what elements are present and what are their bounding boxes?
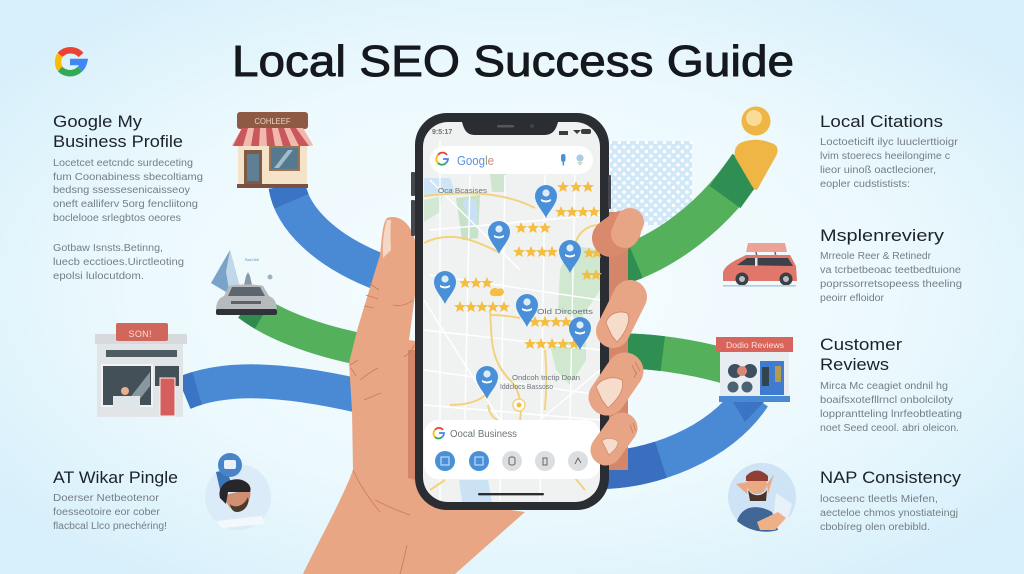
- text block: Google My Business Profile: Business Profile: [53, 132, 183, 151]
- search bar: [430, 146, 593, 174]
- icon: red car with roof rack: [723, 243, 797, 287]
- text block: Google My Business Profile: epolsi lulocutdom.: [53, 271, 144, 282]
- map rating stars: [454, 181, 603, 349]
- bottom business card: [424, 420, 600, 479]
- text block: Msplenreviery: va tcrbetbeoac teetbedtuione: [820, 265, 961, 276]
- status bar: 9:5:17: [432, 129, 452, 136]
- map labels: Old Dircoetts: [537, 309, 594, 316]
- text block: NAP Consistency: locseenc tleetls Miefen,: [820, 494, 938, 505]
- screen map: [423, 122, 600, 502]
- text block: Google My Business Profile: Gotbaw Isnsts.Betinng,: [53, 243, 163, 254]
- text block: Msplenreviery: Msplenreviery: [820, 226, 945, 245]
- text block: NAP Consistency: NAP Consistency: [820, 468, 962, 487]
- text block: Local Citations: lieor uinoß oactlecioner,: [820, 165, 936, 176]
- map labels: [438, 188, 594, 391]
- text block: Google My Business Profile: luecb ecctioes.Uirctleoting: [53, 257, 184, 268]
- icon: small Google G: [436, 153, 448, 165]
- text block: NAP Consistency: aecteloe chmos ynostiateingj: [820, 508, 958, 519]
- text block: Google My Business Profile: bedsng ssessesenicaisseoy: [53, 185, 190, 196]
- text block: Local Citations: lvim stoerecs heeilongime c: [820, 151, 950, 162]
- icon: red sign storefront: SON!: [128, 329, 152, 339]
- text block: Customer Reviews: [820, 335, 962, 434]
- hand: palm and arm: [303, 212, 628, 574]
- home indicator: [478, 493, 544, 495]
- ribbon: green left: [248, 305, 370, 351]
- icon: silver car with map: Raa Db6: [245, 258, 259, 262]
- text block: Customer Reviews: Reviews: [820, 355, 889, 374]
- text block: Google My Business Profile: boclelooe srlegbtos oeores: [53, 213, 181, 224]
- text block: Google My Business Profile: Google My: [53, 112, 143, 131]
- text block: Msplenreviery: poprssorretsopeess theeling: [820, 279, 962, 290]
- icon: silver car with map: [211, 250, 277, 315]
- map labels: Oca Bcasises: [438, 188, 488, 195]
- ribbon: blue bottom right: [600, 396, 764, 470]
- icon: Google logo: [58, 50, 84, 73]
- phone: [411, 113, 611, 510]
- dotted decoration square: [610, 141, 692, 225]
- text block: Customer Reviews: noet Seed ceool. abri oleicon.: [820, 423, 959, 434]
- text block: Google My Business Profile: oneft ealliferv 5org fencliitong: [53, 199, 198, 210]
- map pins: [434, 185, 591, 399]
- ribbon: blue top left: [287, 186, 385, 274]
- card action buttons: [435, 451, 588, 471]
- search wordmark: Google: [457, 153, 494, 168]
- text block: Local Citations: Local Citations: [820, 112, 943, 131]
- text block: Msplenreviery: peoirr efloidor: [820, 293, 885, 304]
- text block: Customer Reviews: lopprantteling lnrfeobtleating: [820, 409, 962, 420]
- ribbon: green top right: [605, 165, 748, 270]
- text block: NAP Consistency: cbobíreg olen orebibld.: [820, 522, 930, 533]
- icon: reviewer avatar with chat bubble: [205, 453, 271, 530]
- text block: AT Wikar Pingle: AT Wikar Pingle: [53, 468, 178, 487]
- phone body: [415, 113, 609, 510]
- text block: Customer Reviews: boaifsxotefllrncl onbolciloty: [820, 395, 953, 406]
- text block: Customer Reviews: Mirca Mc ceagiet ondnil hg: [820, 381, 948, 392]
- text block: Msplenreviery: Mrreole Reer & Retinedr: [820, 251, 932, 262]
- text block: AT Wikar Pingle: [53, 468, 178, 532]
- icon: red sign storefront: [95, 323, 187, 417]
- status bar: [432, 129, 591, 136]
- phone notch: [462, 122, 558, 135]
- text block: Google My Business Profile: fum Coonabiness sbecoltiamg: [53, 172, 203, 183]
- finger 3: [602, 423, 636, 455]
- text block: AT Wikar Pingle: flacbcal Llco pnechéring!: [53, 521, 167, 532]
- text block: Local Citations: Loctoeticift ilyc luuclerttioigr: [820, 137, 959, 148]
- map labels: Ondcoh tnctip Doan: [512, 375, 580, 382]
- finger 1: [606, 297, 630, 342]
- title: Local SEO Success Guide: [232, 37, 794, 86]
- map labels: Iddclocs Bassoso: [500, 384, 553, 391]
- icon: mic: [561, 154, 566, 166]
- text block: Customer Reviews: Customer: [820, 335, 902, 354]
- text block: AT Wikar Pingle: foesseotoire eor cober: [53, 507, 161, 518]
- icon: customer reviews shop: [716, 337, 793, 402]
- icon: customer reviews shop: Dodio Reviews: [726, 340, 784, 350]
- finger 2: [596, 362, 640, 408]
- thumbnail: [383, 220, 391, 258]
- text block: Local Citations: [820, 112, 959, 190]
- hand: fingers: [596, 222, 640, 455]
- icon: coffee shop storefront: [232, 112, 313, 188]
- ribbon: blue middle left: [184, 381, 360, 396]
- text block: AT Wikar Pingle: Doerser Netbeotenor: [53, 493, 160, 504]
- ribbon: green right: [625, 351, 725, 366]
- icon: card Google G: [433, 428, 444, 439]
- text block: Google My Business Profile: [53, 112, 203, 282]
- icon: lens: [576, 154, 584, 166]
- text block: Msplenreviery: [820, 226, 962, 304]
- finger top: [611, 222, 630, 238]
- text block: NAP Consistency: [820, 468, 962, 533]
- icon: bearded man avatar: [728, 463, 796, 532]
- icon: coffee shop storefront: COHLEEF: [254, 117, 291, 126]
- card title: Oocal Business: [450, 429, 517, 440]
- text block: Google My Business Profile: Locetcet eetcndc surdeceting: [53, 158, 193, 169]
- text block: Local Citations: eopler cudstistists:: [820, 179, 910, 190]
- icon: yellow location person: [735, 106, 778, 190]
